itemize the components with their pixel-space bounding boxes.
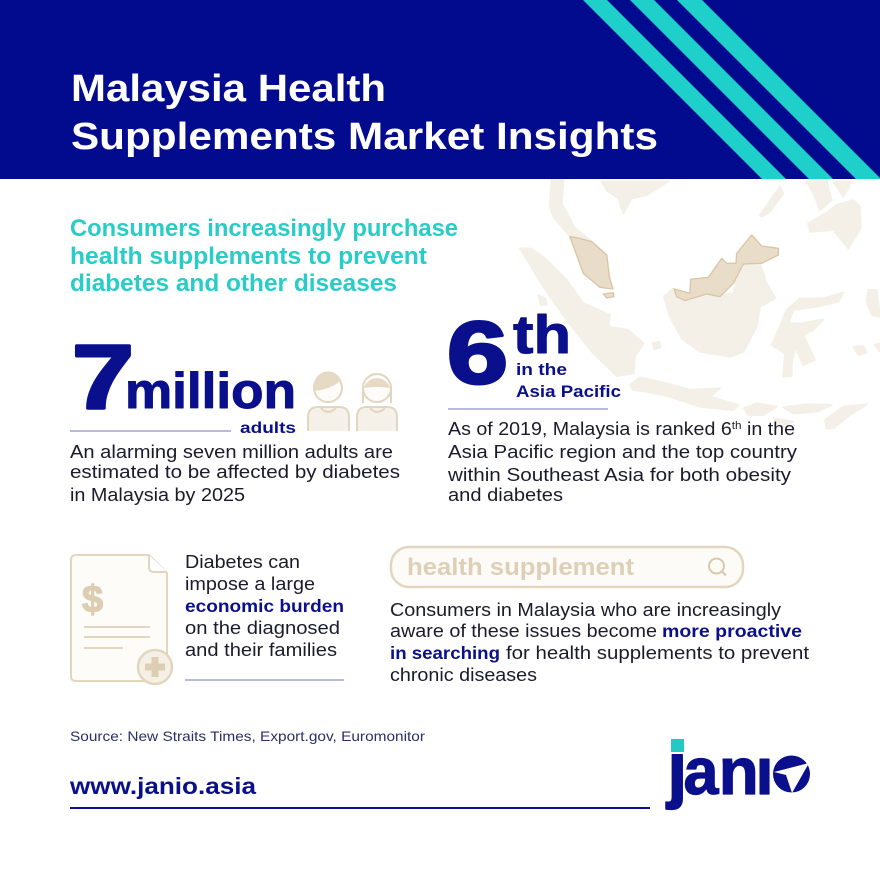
text: ranking description: As of 2019, Malaysia is ranked 6 — [448, 418, 715, 439]
title: Malaysia Health — [71, 68, 386, 110]
logo letters: n — [719, 734, 759, 808]
text: economic burden: economic burden — [185, 596, 344, 616]
logo letters: ı — [756, 734, 774, 808]
text: ranking description — [447, 418, 798, 505]
subheading: Consumers increasingly purchase — [70, 215, 458, 242]
Asia Pacific label: Asia Pacific — [516, 382, 621, 401]
text: seven million description: estimated to be affected by diabetes — [70, 461, 400, 482]
text: seven million description — [70, 441, 400, 505]
subheading — [70, 215, 458, 297]
text: economic burden: and their families — [185, 639, 337, 660]
map of Southeast Asia — [520, 180, 880, 428]
subheading: health supplements to prevent — [70, 243, 427, 270]
text: economic burden: impose a large — [185, 573, 315, 594]
logo letters: a — [684, 734, 720, 808]
text: ranking description: in the — [742, 418, 795, 439]
text: ranking description: Asia Pacific region and the top country — [448, 441, 798, 462]
text: proactive consumers: more proactive — [662, 621, 802, 641]
text: ranking description: th — [732, 420, 742, 432]
search query: health supplement — [407, 554, 634, 581]
icon: two adults — [308, 371, 397, 431]
text: proactive consumers — [390, 599, 809, 685]
text: proactive consumers: Consumers in Malaysia who are increasingly — [390, 599, 782, 620]
in the label: in the — [516, 360, 567, 379]
stat: 7 million adults — [70, 328, 296, 437]
website: www.janio.asia — [69, 773, 256, 799]
logo letters — [665, 727, 774, 810]
text: economic burden — [185, 551, 344, 680]
stat: 6th in the Asia Pacific — [447, 303, 621, 409]
text: proactive consumers: for health supplements to prevent — [506, 642, 809, 663]
o mark — [773, 756, 810, 793]
dollar sign: $ — [82, 579, 103, 621]
plus badge — [138, 650, 172, 684]
text: proactive consumers: chronic diseases — [390, 664, 537, 685]
big number 6: 6 — [447, 303, 508, 402]
search bar — [391, 547, 743, 587]
icon: medical bill document — [71, 555, 172, 684]
text: seven million description: in Malaysia by 2025 — [70, 484, 245, 505]
icon: magnifier — [709, 558, 726, 576]
text: seven million description: An alarming seven million adults are — [70, 441, 393, 462]
title: Supplements Market Insights — [71, 116, 658, 158]
logo letters: j — [665, 727, 688, 810]
teal diagonal stripes — [583, 0, 880, 179]
th label: th — [513, 305, 571, 365]
adults label: adults — [240, 420, 296, 437]
text: economic burden: Diabetes can — [185, 551, 300, 572]
source line: Source: New Straits Times, Export.gov, Euromonitor — [70, 728, 425, 744]
subheading: diabetes and other diseases — [70, 270, 397, 297]
title — [71, 68, 658, 158]
teal dot on the j — [671, 739, 684, 752]
text: proactive consumers: in searching — [390, 643, 500, 663]
highlighted Peninsular Malaysia and Malaysian Borneo — [570, 235, 778, 301]
text: proactive consumers: aware of these issues become — [390, 620, 657, 641]
big number 7: 7 — [72, 328, 134, 428]
text: economic burden: on the diagnosed — [185, 617, 340, 638]
text: ranking description: and diabetes — [448, 484, 563, 505]
header banner — [0, 0, 880, 179]
logo: janio — [665, 727, 810, 810]
text: ranking description: within Southeast Asia for both obesity — [447, 464, 792, 485]
million label: million — [125, 363, 296, 419]
